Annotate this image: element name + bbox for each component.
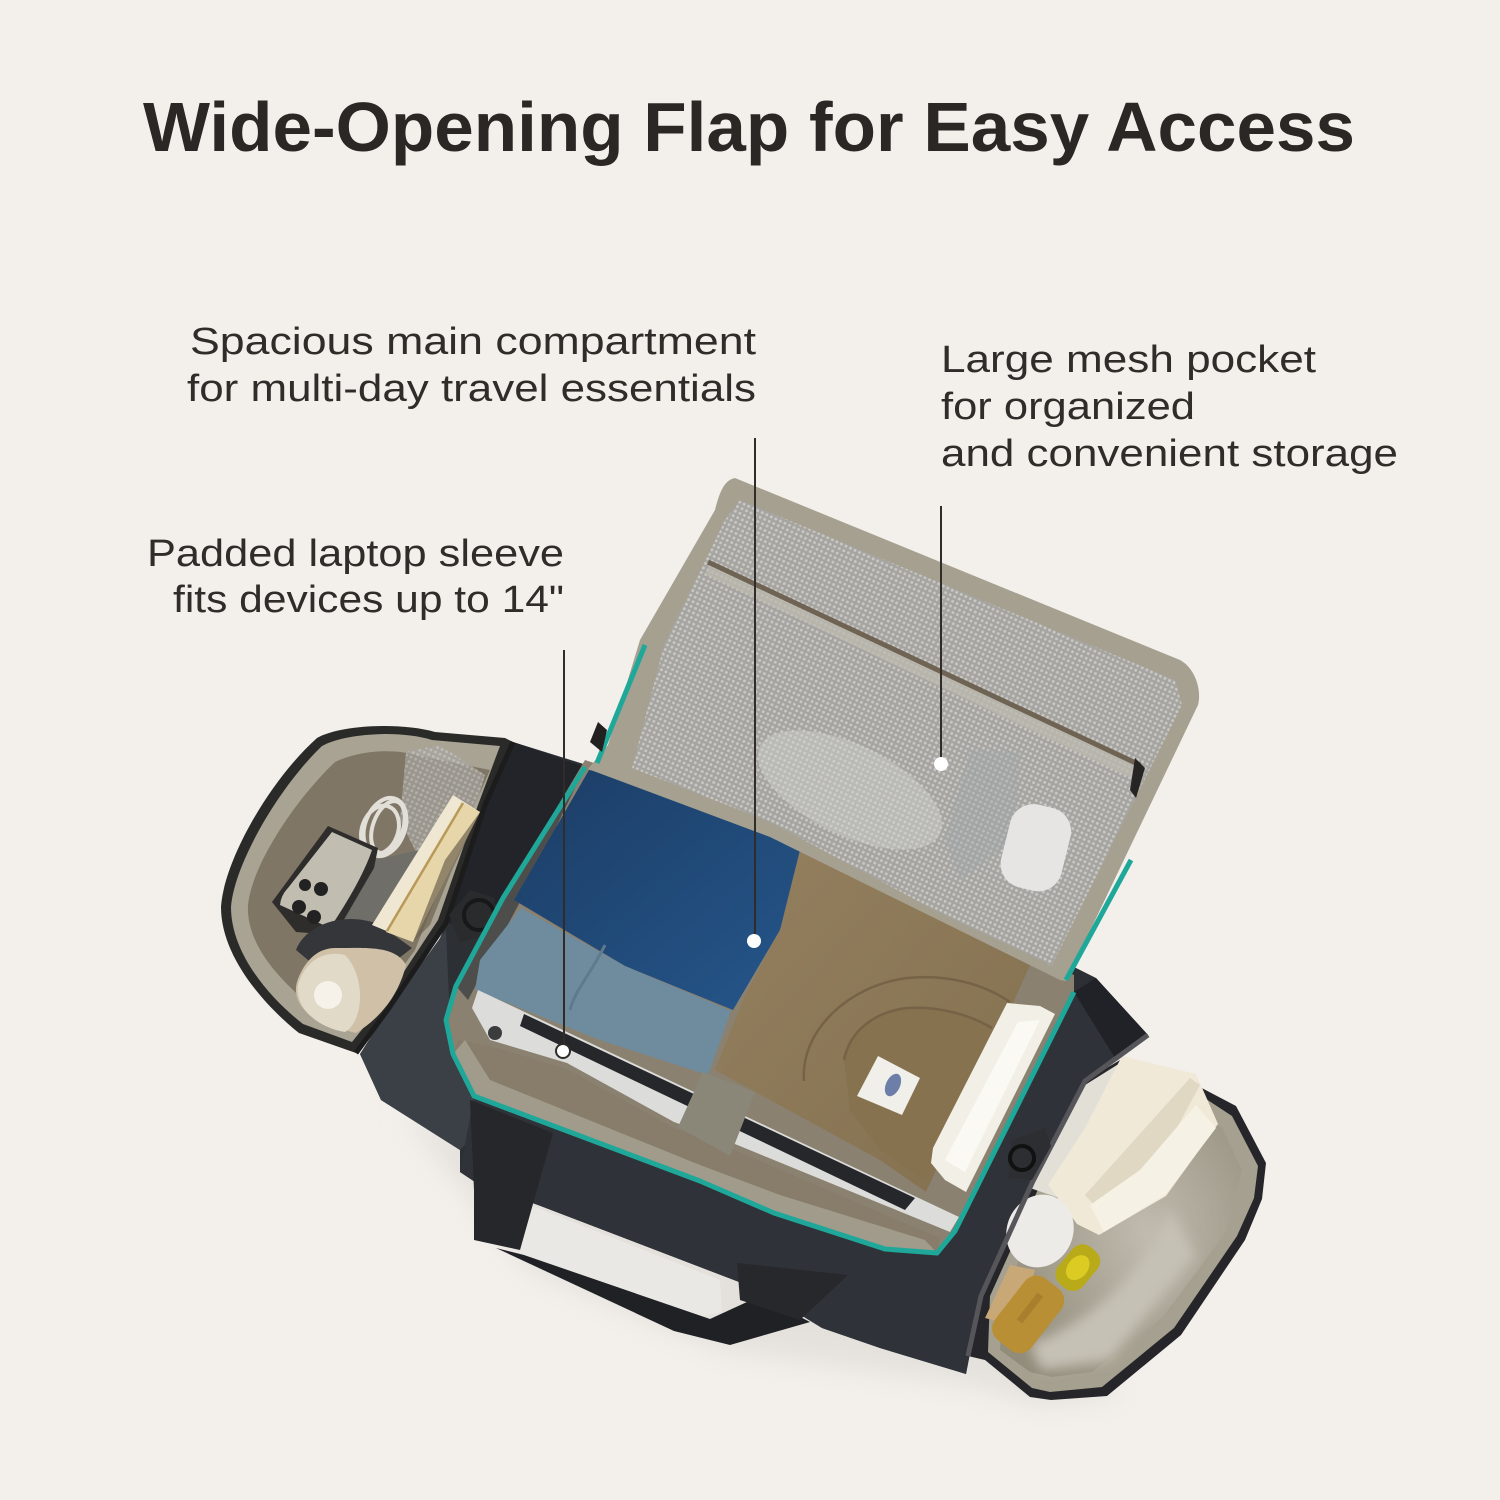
callout: mesh pocket: Large mesh pocket <box>941 339 1317 381</box>
shirt label <box>857 1056 920 1115</box>
right top panel <box>1074 978 1148 1058</box>
icon: phone <box>272 826 378 935</box>
shirt collar and neck <box>804 977 1010 1180</box>
right teal trim <box>1066 860 1131 980</box>
icon: round container <box>994 1184 1086 1278</box>
blue-grey shirt <box>475 908 731 1075</box>
upper end panel <box>445 742 585 925</box>
zipper <box>708 562 1140 765</box>
teal zipper trim <box>446 767 1074 1253</box>
right end pocket <box>968 1056 1266 1400</box>
soft bag shadow <box>400 1110 1130 1405</box>
navy shirt <box>514 770 804 1010</box>
icon: tan bottle <box>985 1265 1035 1322</box>
side strap ring right <box>1008 1128 1051 1180</box>
callout: laptop sleeve: Padded laptop sleeve <box>147 533 564 575</box>
flap trim <box>588 478 1199 981</box>
side strap ring <box>449 890 495 942</box>
callout: laptop sleeve <box>147 533 570 1058</box>
mesh behind towel <box>1030 1060 1125 1200</box>
main compartment <box>446 760 1074 1253</box>
earbud case <box>995 799 1076 896</box>
white pouch <box>931 1003 1055 1192</box>
laptop strap <box>678 1072 755 1156</box>
compartment lining <box>446 760 1074 1253</box>
zipper tape <box>708 568 1135 772</box>
left teal trim <box>597 645 645 763</box>
sleeve lining <box>453 1040 940 1253</box>
icon: brown bottle <box>986 1269 1070 1359</box>
left body panel <box>360 930 474 1150</box>
sleeve edge band <box>453 1040 937 1253</box>
ghost contents behind mesh <box>740 706 960 874</box>
callout: main compartment: Spacious main compartment <box>190 321 757 363</box>
dark lining shadow <box>456 767 585 1000</box>
callout: mesh pocket: for organized <box>941 386 1195 428</box>
lower body panel <box>460 992 1148 1374</box>
zipper pulls <box>590 722 607 752</box>
bag illustration <box>221 478 1266 1405</box>
handle gap highlight <box>520 1205 722 1322</box>
brown shirt <box>715 850 1030 1192</box>
title: Wide-Opening Flap for Easy Access <box>143 88 1355 166</box>
icon: yellow bottle <box>1050 1239 1105 1296</box>
callout: mesh pocket <box>934 339 1398 771</box>
open flap <box>588 478 1199 981</box>
callout: main compartment: for multi-day travel essentials <box>187 368 756 410</box>
cables <box>355 792 414 862</box>
handles <box>470 1100 848 1345</box>
icon: towel <box>1048 1056 1218 1235</box>
mesh pocket panel <box>632 500 1182 967</box>
left end pocket <box>221 726 513 1053</box>
bag body <box>360 742 1148 1374</box>
mesh pouch <box>400 745 485 860</box>
icon: books <box>372 795 480 942</box>
dark umbrella holder <box>296 919 412 970</box>
laptop <box>472 990 959 1232</box>
seam of left pocket <box>356 742 513 1053</box>
icon: umbrella <box>296 948 406 1033</box>
callout: mesh pocket: and convenient storage <box>941 433 1398 475</box>
callout: main compartment <box>187 321 761 948</box>
callout: laptop sleeve: fits devices up to 14" <box>173 579 564 621</box>
